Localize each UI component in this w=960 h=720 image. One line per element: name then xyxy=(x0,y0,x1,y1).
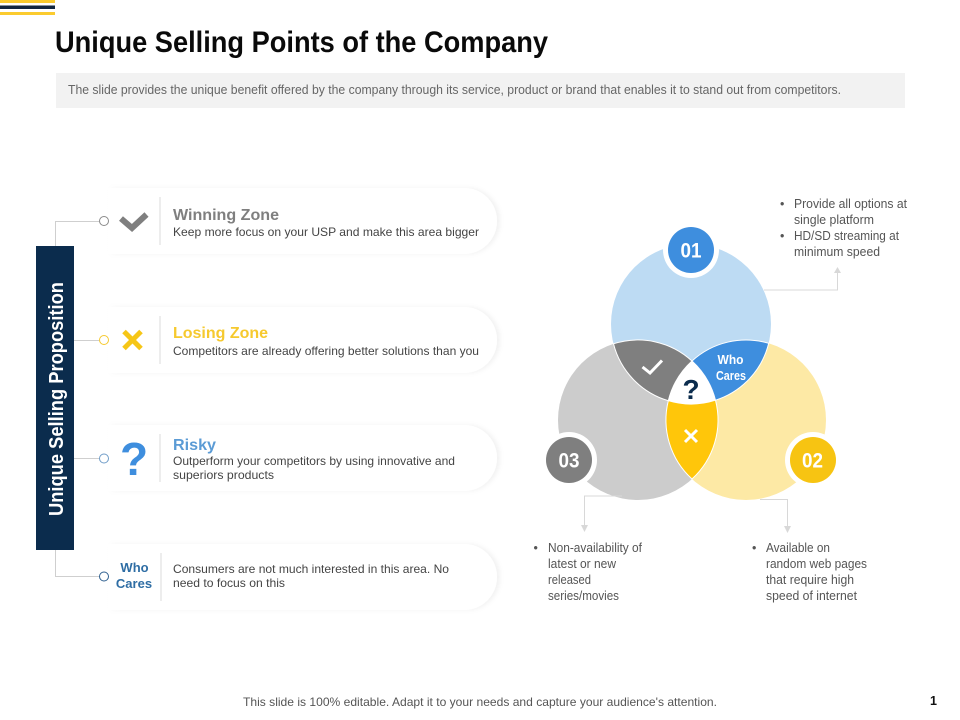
text block: circle 01 points: Provide all options at xyxy=(794,197,908,211)
text block: circle 03 points: series/movies xyxy=(548,589,619,603)
text block: circle 02 points: • xyxy=(752,541,756,555)
panel: losing zone: Competitors are already offering better solutions than you xyxy=(173,344,479,358)
text block: circle 03 points xyxy=(534,541,642,603)
text block: circle 02 points: speed of internet xyxy=(766,589,858,603)
text block: circle 01 points: • xyxy=(780,197,784,211)
icon: question mark: ? xyxy=(120,433,148,485)
panel: losing zone xyxy=(90,299,497,381)
icon: who cares label: Cares xyxy=(116,576,152,591)
text block: circle 01 points: • xyxy=(780,229,784,243)
top accent stripes xyxy=(0,0,55,15)
text block: circle 02 points: Available on xyxy=(766,541,830,555)
panel: risky: Risky xyxy=(173,437,216,454)
venn diagram xyxy=(558,244,826,500)
page number: 1 xyxy=(930,694,937,708)
badge 02 xyxy=(785,432,841,488)
connector nodes xyxy=(100,216,108,581)
text block: circle 03 points: latest or new xyxy=(548,557,617,571)
text block: circle 01 points: minimum speed xyxy=(794,245,880,259)
arrow: blue circle to list xyxy=(764,267,841,290)
text block: circle 01 points xyxy=(780,197,908,259)
panel: risky: superiors products xyxy=(173,468,274,482)
badge 01 xyxy=(663,222,719,278)
panel: risky: Outperform your competitors by using innovative and xyxy=(173,454,455,468)
footer note: This slide is 100% editable. Adapt it to your needs and capture your audience's attention. xyxy=(243,695,717,709)
panel: who cares: need to focus on this xyxy=(173,576,285,590)
text block: circle 02 points: random web pages xyxy=(766,557,867,571)
badge 03: 03 xyxy=(558,450,580,472)
icon: who cares label xyxy=(116,560,152,591)
title: Unique Selling Points of the Company xyxy=(55,26,548,59)
arrow: gray circle to list xyxy=(581,496,622,532)
vertical label bar xyxy=(36,246,74,550)
panel: winning zone: Keep more focus on your USP and make this area bigger xyxy=(173,225,479,239)
text block: circle 03 points: Non-availability of xyxy=(548,541,642,555)
icon: cross xyxy=(124,332,141,348)
venn diagram: Who xyxy=(718,353,744,367)
panel: who cares xyxy=(90,536,497,618)
badge 03 xyxy=(541,432,597,488)
panel: risky xyxy=(90,417,497,499)
subtitle band: The slide provides the unique benefit offered by the company through its service, product or brand that enables it to stand out from competitors. xyxy=(68,83,841,97)
text block: circle 03 points: released xyxy=(548,573,591,587)
panel: who cares: Consumers are not much interested in this area. No xyxy=(173,562,449,576)
connectors from the vertical bar to the zones xyxy=(56,222,99,576)
icon: who cares label: Who xyxy=(120,560,149,575)
badge 01: 01 xyxy=(680,240,702,262)
venn diagram: ? xyxy=(682,374,700,405)
text block: circle 03 points: • xyxy=(534,541,538,555)
venn diagram: Cares xyxy=(716,369,746,383)
subtitle band xyxy=(56,73,905,108)
text block: circle 01 points: HD/SD streaming at xyxy=(794,229,899,243)
panel: winning zone: Winning Zone xyxy=(173,207,279,224)
panel: losing zone: Losing Zone xyxy=(173,325,268,342)
arrow: yellow circle to list xyxy=(760,500,791,533)
panel: winning zone xyxy=(90,180,497,262)
icon: check xyxy=(121,214,146,228)
badge 02: 02 xyxy=(802,450,823,472)
text block: circle 02 points: that require high xyxy=(766,573,854,587)
text block: circle 02 points xyxy=(752,541,867,603)
vertical label bar: Unique Selling Proposition xyxy=(46,282,68,516)
text block: circle 01 points: single platform xyxy=(794,213,874,227)
